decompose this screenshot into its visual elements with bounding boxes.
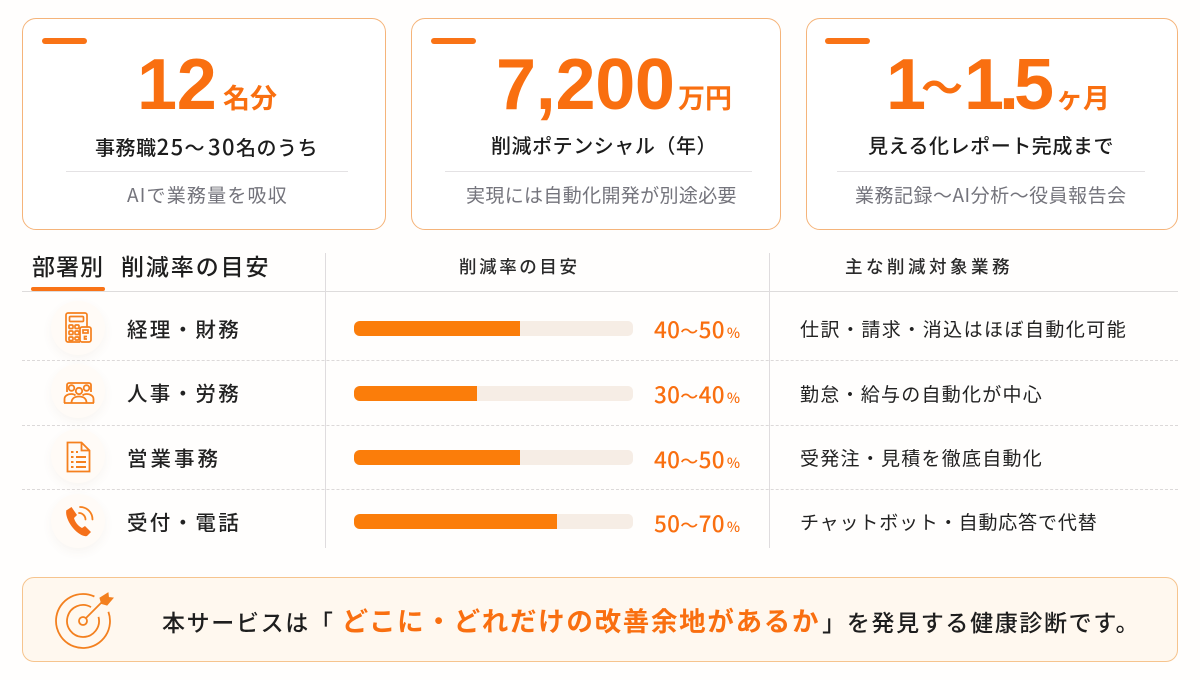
department name: 営業事務 xyxy=(127,442,221,472)
stat value 1~1.5: 1.5 xyxy=(964,45,1049,125)
row: 受付・電話 xyxy=(66,506,1098,548)
rate: 40～50% xyxy=(654,313,740,345)
row: 人事・労務 xyxy=(64,377,1043,418)
accent bar 1 xyxy=(42,38,87,44)
row: 経理・財務 xyxy=(65,312,1127,356)
department name: 経理・財務 xyxy=(127,313,241,343)
rate: 50～70% xyxy=(654,507,740,539)
task: チャットボット・自動応答で代替 xyxy=(800,508,1098,535)
table heading: 部署別 xyxy=(32,248,104,282)
column heading: rate: 削減率の目安 xyxy=(459,254,580,279)
column heading: tasks: 主な削減対象業務 xyxy=(845,254,1013,279)
bar xyxy=(354,514,633,529)
stat value 1~1.5: ～ xyxy=(921,55,963,116)
stat unit 万円: 万円 xyxy=(678,77,732,116)
icon: target xyxy=(55,592,114,649)
stat note 2: 実現には自動化開発が別途必要 xyxy=(466,181,737,208)
stat value 1~1.5: 1 xyxy=(886,45,926,125)
stat unit ヶ月: ヶ月 xyxy=(1056,77,1110,116)
stat note 1: AIで業務量を吸収 xyxy=(127,181,288,208)
bar xyxy=(354,321,633,336)
stat value 12: 12 xyxy=(137,45,216,125)
heading underline xyxy=(31,287,105,291)
stat unit 名分: 名分 xyxy=(223,77,277,116)
rate: 40～50% xyxy=(654,443,740,475)
stat heading 1: 事務職25～30名のうち xyxy=(95,130,318,162)
table heading 2: 削減率の目安 xyxy=(121,248,270,282)
callout text: 本サービスは「 どこに・どれだけの改善余地があるか」を発見する健康診断です。 xyxy=(162,600,1140,639)
icon: phone xyxy=(51,494,105,548)
rate: 30～40% xyxy=(654,378,740,410)
callout banner xyxy=(22,577,1178,662)
accent bar 2 xyxy=(431,38,476,44)
stat value 1~1.5 xyxy=(886,45,1052,125)
task: 受発注・見積を徹底自動化 xyxy=(800,444,1043,471)
row: 営業事務 xyxy=(66,442,1043,484)
department name: 受付・電話 xyxy=(127,506,241,536)
department name: 人事・労務 xyxy=(127,377,241,407)
stat heading 2: 削減ポテンシャル（年） xyxy=(491,130,717,159)
icon: calculator xyxy=(51,301,105,355)
stat heading 3: 見える化レポート完成まで xyxy=(868,130,1114,159)
bar xyxy=(354,386,633,401)
icon: document xyxy=(51,429,105,483)
panel: stat duration xyxy=(806,18,1178,230)
stat note 3: 業務記録～AI分析～役員報告会 xyxy=(855,181,1127,208)
task: 勤怠・給与の自動化が中心 xyxy=(800,380,1043,407)
icon: people xyxy=(51,364,105,418)
accent bar 3 xyxy=(825,38,870,44)
stat value 7,200: 7,200 xyxy=(496,45,675,125)
bar xyxy=(354,450,633,465)
task: 仕訳・請求・消込はほぼ自動化可能 xyxy=(800,315,1127,342)
panel: stat 7200 xyxy=(411,18,781,230)
panel: stat 12 xyxy=(22,18,386,230)
